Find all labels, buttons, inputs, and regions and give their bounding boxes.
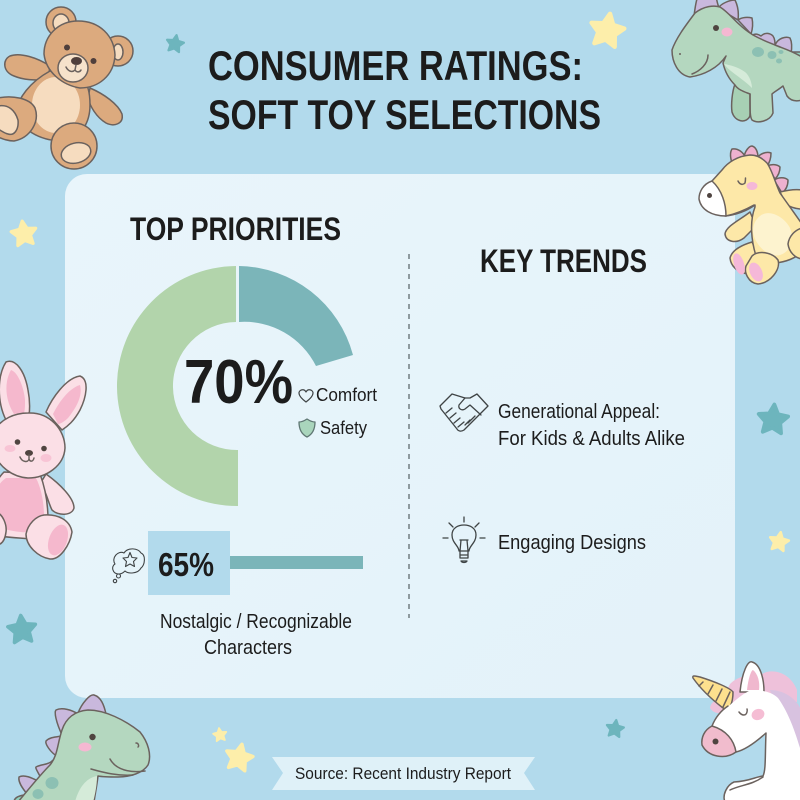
safety legend item (299, 418, 367, 438)
pink bunny left (0, 361, 86, 559)
comfort legend item: Comfort (316, 385, 377, 405)
value bar (230, 556, 363, 569)
source ribbon (272, 757, 535, 790)
teddy bear illustration (0, 7, 133, 169)
source ribbon: Source: Recent Industry Report (295, 764, 511, 783)
green dinosaur top right (672, 0, 800, 122)
trend: generational appeal (440, 394, 685, 450)
trend: generational appeal: Generational Appeal: (498, 401, 660, 423)
stat: 65% nostalgic (113, 531, 363, 659)
title: SOFT TOY SELECTIONS (208, 91, 601, 138)
green dinosaur bottom left (14, 695, 150, 800)
trend: engaging designs (443, 517, 646, 562)
heading: top priorities: TOP PRIORITIES (130, 211, 341, 247)
stat label: Characters (204, 637, 292, 659)
unicorn bottom right (693, 662, 800, 800)
column divider (408, 254, 410, 618)
trend: generational appeal: For Kids & Adults Alike (498, 428, 685, 450)
yellow dinosaur top right (699, 146, 800, 284)
donut chart (117, 266, 353, 506)
value 65%: 65% (158, 546, 214, 583)
stat label: Nostalgic / Recognizable (160, 611, 352, 633)
trend: engaging designs: Engaging Designs (498, 532, 646, 554)
main panel (65, 174, 735, 698)
title (208, 42, 601, 138)
safety legend item: Safety (320, 418, 367, 438)
heading: key trends: KEY TRENDS (480, 243, 647, 279)
icon: shield (299, 419, 315, 437)
value box (148, 531, 230, 595)
icon: handshake (440, 394, 488, 431)
title: CONSUMER RATINGS: (208, 42, 583, 89)
icon: light bulb (443, 517, 485, 562)
icon: heart (299, 390, 313, 402)
donut value 70%: 70% (184, 348, 293, 417)
icon: thought bubble with star (113, 549, 144, 583)
stat label (160, 611, 352, 659)
